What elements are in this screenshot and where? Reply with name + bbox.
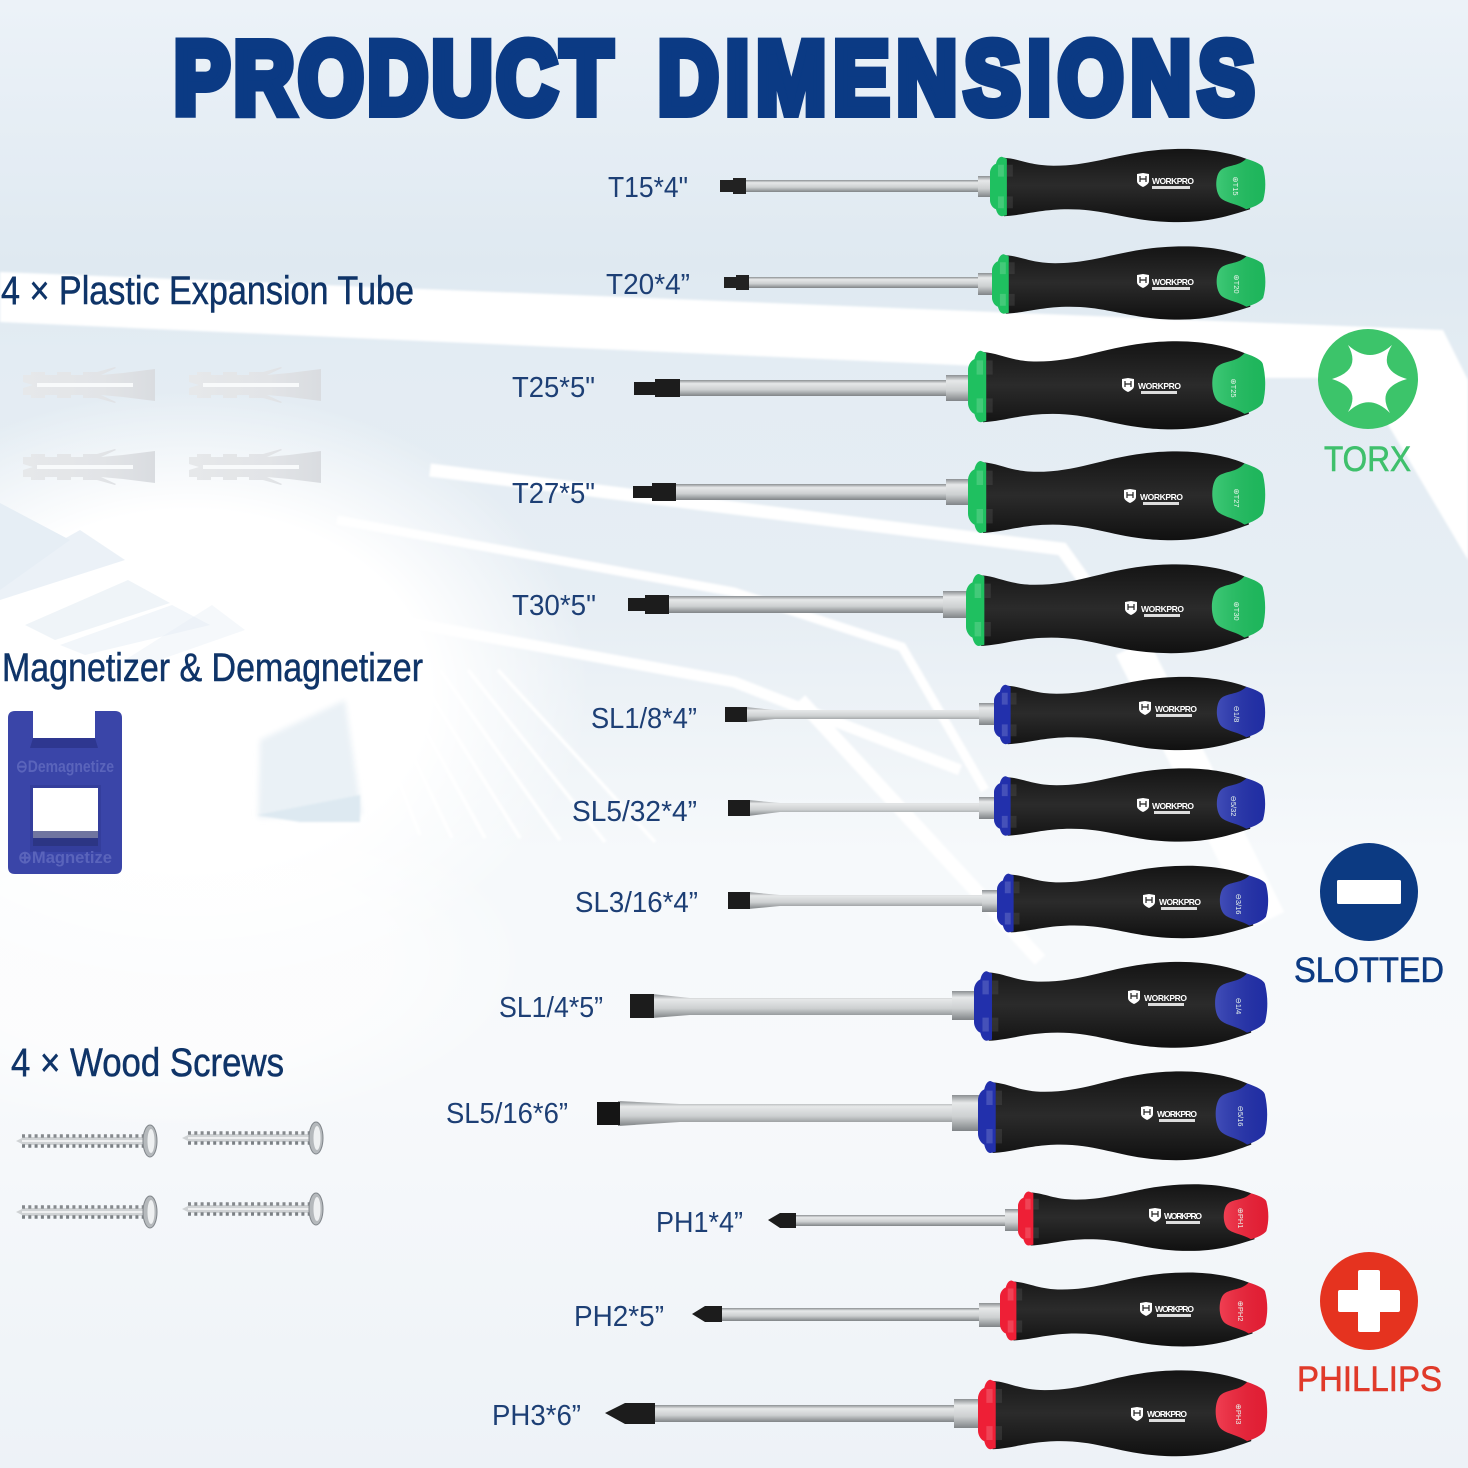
screwdriver: SL1/4	[499, 962, 1267, 1048]
screwdriver: T20: ⊛T20	[1232, 274, 1241, 294]
screwdriver: PH3: ⊕PH3	[1234, 1404, 1243, 1424]
title: PRODUCT	[174, 21, 616, 135]
screwdriver: PH3: PH3*6”	[492, 1400, 581, 1432]
label: torx: TORX	[1324, 440, 1411, 479]
screwdriver: SL3/16	[575, 866, 1268, 938]
screwdriver: SL5/16	[446, 1071, 1267, 1160]
screwdriver: T30: T30*5"	[512, 590, 596, 622]
wood screws	[16, 1122, 323, 1228]
screwdriver: SL5/16: WORKPRO	[1157, 1109, 1197, 1119]
screwdriver: T20	[606, 246, 1265, 320]
heading: plastic expansion tube: 4 × Plastic Expansion Tube	[1, 269, 414, 313]
screwdriver: SL1/8: SL1/8*4”	[591, 703, 697, 735]
screwdriver: T25: WORKPRO	[1138, 381, 1181, 391]
screwdriver: SL1/8	[591, 677, 1265, 750]
magnetizer block: ⊕Magnetize	[18, 848, 112, 867]
screwdriver: T30: WORKPRO	[1141, 604, 1184, 614]
screwdriver: SL1/4: ⊖1/4	[1234, 998, 1243, 1014]
screwdriver: T25: ⊛T25	[1229, 378, 1238, 398]
label: phillips: PHILLIPS	[1297, 1360, 1442, 1399]
screwdriver: T27: T27*5"	[512, 478, 595, 510]
screwdriver: T15: T15*4"	[608, 172, 688, 204]
screwdriver: T27: ⊛T27	[1232, 488, 1241, 508]
screwdriver: SL5/16: SL5/16*6”	[446, 1098, 568, 1130]
screwdriver: T20: WORKPRO	[1152, 277, 1194, 287]
screwdriver: PH1: WORKPRO	[1164, 1211, 1202, 1221]
screwdriver: PH2: ⊕PH2	[1236, 1301, 1245, 1321]
screwdriver: SL5/32: ⊖5/32	[1229, 796, 1238, 816]
screwdriver: SL5/32: SL5/32*4”	[572, 796, 697, 828]
screwdriver: T25	[512, 341, 1265, 429]
plastic expansion tubes	[23, 367, 321, 485]
title	[174, 21, 1262, 135]
screwdriver: PH2: PH2*5”	[574, 1301, 664, 1333]
screwdriver: SL3/16: WORKPRO	[1159, 897, 1201, 907]
screwdriver: SL3/16: ⊖3/16	[1234, 894, 1243, 914]
screwdriver: T30: ⊛T30	[1232, 601, 1241, 621]
screwdriver: SL1/8: ⊖1/8	[1232, 706, 1241, 722]
screwdriver: SL1/8: WORKPRO	[1155, 704, 1197, 714]
screwdriver: T27	[512, 451, 1265, 540]
screwdriver: PH1: PH1*4”	[656, 1207, 743, 1239]
screwdriver: T30	[512, 564, 1265, 653]
screwdriver: T15: ⊛T15	[1231, 176, 1240, 196]
title: DIMENSIONS	[658, 21, 1262, 135]
screwdriver: PH3: WORKPRO	[1147, 1409, 1187, 1419]
screwdriver: SL1/4: WORKPRO	[1144, 993, 1187, 1003]
magnetizer block: ⊖Demagnetize	[16, 757, 114, 776]
screwdriver: PH1	[656, 1184, 1268, 1251]
icon: torx	[1318, 329, 1418, 429]
magnetizer block	[8, 711, 122, 874]
icon: slotted	[1320, 843, 1418, 941]
screwdriver: T20: T20*4”	[606, 269, 690, 301]
screwdriver: T25: T25*5"	[512, 372, 595, 404]
screwdriver: T27: WORKPRO	[1140, 492, 1183, 502]
screwdriver: SL5/32	[572, 768, 1265, 842]
label: slotted: SLOTTED	[1294, 951, 1444, 990]
screwdriver: SL5/16: ⊖5/16	[1236, 1106, 1245, 1126]
screwdriver: SL3/16: SL3/16*4”	[575, 887, 698, 919]
screwdriver: PH2: WORKPRO	[1155, 1304, 1194, 1314]
screwdriver: SL1/4: SL1/4*5”	[499, 992, 603, 1024]
screwdriver: PH3	[492, 1370, 1267, 1456]
screwdriver: T15: WORKPRO	[1152, 176, 1194, 186]
heading: wood screws: 4 × Wood Screws	[11, 1041, 284, 1085]
screwdriver: SL5/32: WORKPRO	[1152, 801, 1194, 811]
screwdriver: T15	[608, 149, 1265, 222]
screwdriver: PH1: ⊕PH1	[1236, 1208, 1245, 1228]
heading: magnetizer: Magnetizer & Demagnetizer	[2, 646, 423, 690]
icon: phillips	[1320, 1252, 1418, 1350]
screwdriver: PH2	[574, 1272, 1267, 1346]
